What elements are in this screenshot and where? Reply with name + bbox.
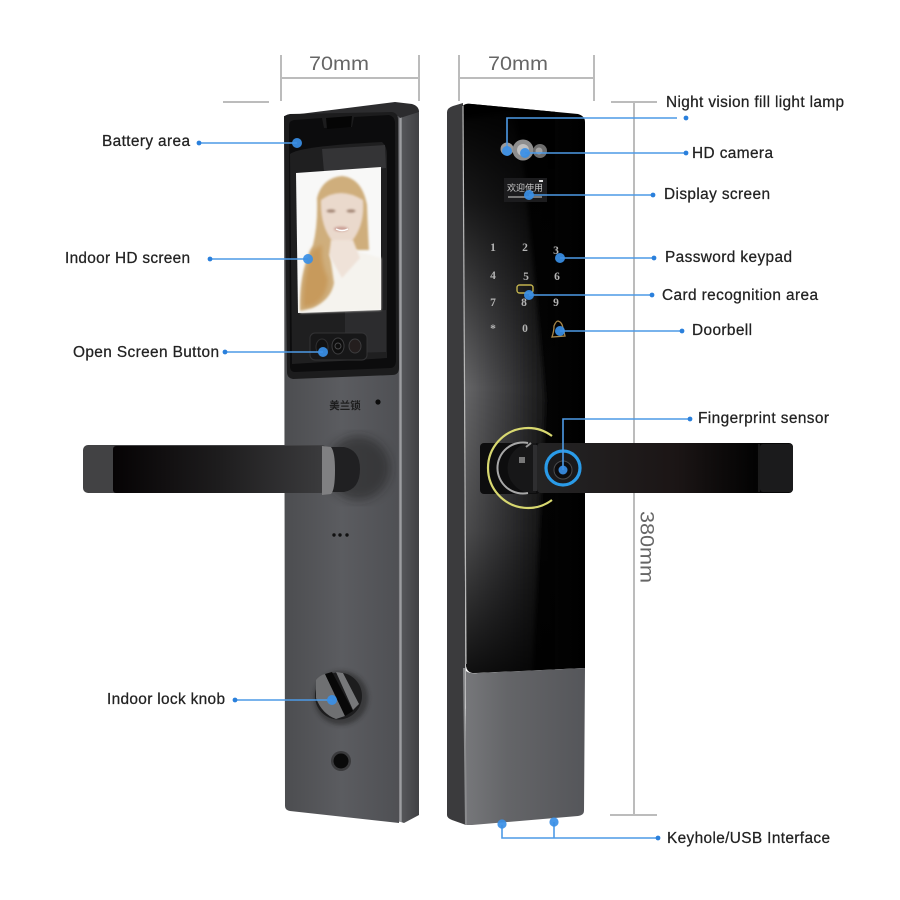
password keypad	[490, 242, 560, 335]
doorbell icon	[552, 321, 565, 337]
top surface	[284, 102, 419, 122]
password keypad: 4	[490, 270, 496, 282]
password keypad: 2	[522, 242, 528, 254]
label: Night vision fill light lamp	[502, 94, 844, 156]
woman: body	[300, 250, 381, 313]
password keypad: 5	[523, 271, 529, 283]
panel: outdoor lock body	[447, 100, 793, 825]
display screen: 欢迎使用	[507, 181, 543, 194]
label: Card recognition area	[524, 287, 818, 304]
label: HD camera	[520, 145, 773, 162]
label: Indoor lock knob: Indoor lock knob	[107, 691, 225, 708]
handle rose arc	[488, 428, 552, 508]
outdoor handle	[480, 428, 793, 508]
battery bezel	[284, 112, 399, 379]
label: Card recognition area: Card recognition area	[662, 287, 818, 304]
label: Indoor HD screen	[65, 250, 313, 267]
metal lower plate	[466, 668, 585, 825]
label: Open Screen Button: Open Screen Button	[73, 344, 219, 361]
dimension: right lock width 70mm: 70mm	[488, 54, 548, 75]
label: Battery area: Battery area	[102, 133, 190, 150]
label: Display screen	[524, 186, 770, 203]
open screen button group	[310, 333, 367, 360]
knob shadow	[314, 671, 368, 725]
fingerprint sensor ring	[546, 451, 580, 485]
indicator hole	[375, 399, 381, 405]
outdoor lock side	[447, 103, 466, 825]
woman: face	[321, 193, 363, 245]
label: Keyhole/USB Interface	[497, 817, 830, 847]
panel: indoor lock body	[83, 102, 419, 823]
password keypad: 9	[553, 297, 559, 309]
label: Display screen: Display screen	[664, 186, 770, 203]
lock body side	[398, 104, 419, 823]
indoor handle	[83, 445, 360, 495]
dimension: height 380mm: 380mm	[636, 511, 656, 583]
label: Open Screen Button	[73, 344, 328, 361]
handle shadow	[326, 436, 390, 500]
lock body front	[284, 104, 399, 823]
camera group	[500, 140, 547, 160]
label: Night vision fill light lamp: Night vision fill light lamp	[666, 94, 844, 111]
password keypad: 0	[522, 323, 528, 335]
dimension: right lock width 70mm	[459, 54, 594, 101]
dimension: left lock width 70mm	[223, 54, 419, 102]
microphone dots	[332, 533, 349, 537]
label: Password keypad: Password keypad	[665, 249, 792, 266]
label: Fingerprint sensor: Fingerprint sensor	[698, 410, 829, 427]
outdoor glass face	[463, 104, 585, 673]
woman: features	[326, 209, 356, 231]
dimension: height 380mm	[610, 102, 657, 815]
label: Fingerprint sensor	[558, 410, 829, 474]
card recognition icon	[517, 285, 533, 293]
password keypad: 6	[554, 271, 560, 283]
label: Doorbell	[555, 322, 752, 339]
indoor HD screen photo	[296, 167, 381, 313]
label: HD camera: HD camera	[692, 145, 773, 162]
label: Indoor HD screen: Indoor HD screen	[65, 250, 190, 267]
dimension: left lock width 70mm: 70mm	[309, 54, 369, 75]
label: Battery area	[102, 133, 302, 150]
woman: neck	[329, 240, 360, 278]
password keypad: *	[490, 323, 496, 335]
label: Password keypad	[555, 249, 792, 266]
indoor lock knob	[315, 672, 362, 720]
label: Indoor lock knob	[107, 691, 337, 708]
password keypad: 7	[490, 297, 496, 309]
password keypad: 1	[490, 242, 496, 254]
indoor keyhole	[331, 751, 351, 771]
glass reflection	[455, 100, 555, 680]
knob interior	[508, 443, 536, 493]
label: Keyhole/USB Interface: Keyhole/USB Interface	[667, 830, 830, 847]
woman: hair	[300, 176, 369, 311]
password keypad: 8	[521, 297, 527, 309]
display screen	[504, 178, 547, 202]
label: Doorbell: Doorbell	[692, 322, 752, 339]
brand logo text: 美兰锁	[329, 398, 361, 413]
password keypad: 3	[553, 245, 559, 257]
battery cover notch	[326, 116, 352, 129]
